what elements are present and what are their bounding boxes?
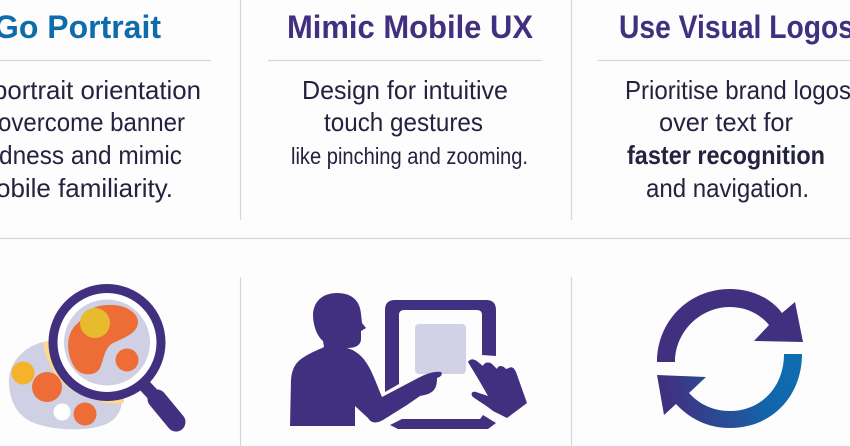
text block: go portrait: obile familiarity.: [0, 173, 173, 203]
text block: go portrait: dness and mimic: [0, 140, 182, 170]
tablet frame: [385, 300, 496, 392]
panel: use visual logos: [619, 9, 850, 203]
handle: [145, 386, 158, 400]
text block: mimic mobile ux: touch gestures: [324, 107, 483, 137]
text block: use visual logos: [625, 75, 850, 203]
person: [290, 293, 442, 426]
panel: go portrait: [0, 9, 201, 203]
tablet screen: [415, 324, 466, 374]
lower arrow: [657, 354, 802, 428]
text block: mimic mobile ux: [291, 75, 528, 169]
text block: go portrait: overcome banner: [0, 107, 185, 137]
text block: use visual logos: over text for: [659, 107, 793, 137]
text block: use visual logos: faster recognition: [627, 140, 825, 170]
lens: [53, 288, 161, 396]
icon: magnifying glass over map: [9, 288, 176, 429]
map blob: [9, 342, 122, 429]
heading: mimic mobile ux: Mimic Mobile UX: [287, 9, 534, 45]
text block: go portrait: [0, 75, 201, 203]
hand: [468, 359, 527, 418]
upper arrow: [657, 289, 803, 362]
icon: person using touch tablet: [290, 293, 527, 429]
text block: mimic mobile ux: like pinching and zooming.: [291, 143, 528, 169]
text block: mimic mobile ux: Design for intuitive: [302, 75, 508, 105]
icon: circular refresh arrows: [657, 289, 803, 428]
panel: mimic mobile ux: [287, 9, 534, 169]
text block: use visual logos: and navigation.: [646, 173, 809, 203]
